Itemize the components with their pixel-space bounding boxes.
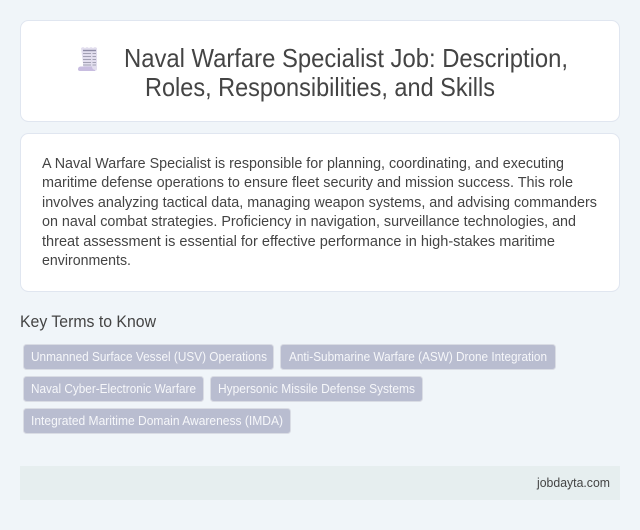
icon: document scroll xyxy=(78,47,97,71)
description text: A Naval Warfare Specialist is responsible for planning, coordinating, and executing xyxy=(42,156,564,172)
description text: environments. xyxy=(42,253,131,269)
description text: involves analyzing tactical data, managing weapon systems, and advising commanders xyxy=(42,195,597,211)
heading: key terms: Key Terms to Know xyxy=(20,313,156,331)
description text: maritime defense operations to ensure fleet security and mission success. This role xyxy=(42,175,573,191)
title xyxy=(124,43,568,102)
footer bar xyxy=(20,466,620,500)
footer bar: jobdayta.com xyxy=(536,476,610,490)
tag: hypersonic missile defense xyxy=(210,376,422,402)
tag: naval cyber-electronic warfare: Naval Cyber-Electronic Warfare xyxy=(31,382,196,396)
title: Naval Warfare Specialist Job: Description, xyxy=(124,43,568,73)
title: Roles, Responsibilities, and Skills xyxy=(145,72,495,102)
panel: title card xyxy=(20,20,620,122)
tag: IMDA xyxy=(24,408,290,434)
tag: USV operations xyxy=(24,344,274,370)
tag: USV operations: Unmanned Surface Vessel (USV) Operations xyxy=(31,350,267,364)
tag: hypersonic missile defense: Hypersonic Missile Defense Systems xyxy=(218,382,415,396)
tag: IMDA: Integrated Maritime Domain Awareness (IMDA) xyxy=(31,414,283,428)
panel: description card xyxy=(20,134,620,292)
tag: ASW drone integration xyxy=(280,344,556,370)
description text xyxy=(42,156,597,269)
description text: on naval combat strategies. Proficiency in navigation, surveillance technologies, and xyxy=(42,214,576,230)
tag: ASW drone integration: Anti-Submarine Warfare (ASW) Drone Integration xyxy=(289,350,547,364)
description text: threat assessment is essential for effective performance in high-stakes maritime xyxy=(42,234,555,250)
tag: naval cyber-electronic warfare xyxy=(24,376,204,402)
